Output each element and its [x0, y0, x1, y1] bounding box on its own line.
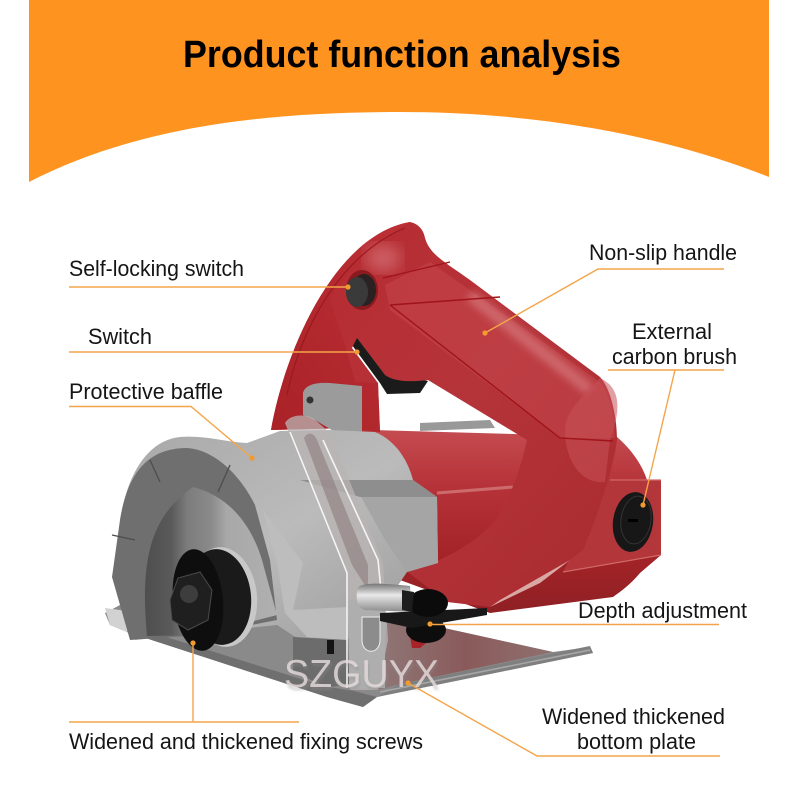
self-locking button	[346, 270, 378, 310]
callout: non-slip handle: Non-slip handle	[589, 240, 737, 265]
callout: widened thickened bottom plate: bottom plate	[577, 729, 696, 754]
callout: non-slip handle	[482, 240, 737, 336]
callout: widened thickened bottom plate: Widened thickened	[542, 704, 725, 729]
watermark: SZGUYX	[284, 653, 439, 696]
callout: self-locking switch	[69, 256, 351, 290]
blade flange and fixing bolt	[168, 544, 262, 653]
callout: depth adjustment	[427, 598, 747, 627]
callout: external carbon brush: External	[632, 319, 712, 344]
callout: protective baffle	[69, 379, 255, 461]
metal depth bracket	[285, 415, 388, 690]
callout: depth adjustment: Depth adjustment	[578, 598, 747, 623]
black carbon brush cap	[609, 490, 657, 554]
callout: widened and thickened fixing screws	[69, 640, 423, 754]
watermark: SZGUYX	[285, 656, 440, 699]
red handle and fin	[271, 222, 617, 607]
product illustration: cutting machine	[105, 222, 661, 707]
black trigger	[352, 335, 428, 394]
callout: widened and thickened fixing screws: Widened and thickened fixing screws	[69, 729, 423, 754]
header banner	[29, 0, 769, 182]
callout: self-locking switch: Self-locking switch	[69, 256, 244, 281]
title: Product function analysis	[183, 34, 621, 76]
callout: external carbon brush	[608, 319, 737, 508]
callout: protective baffle: Protective baffle	[69, 379, 223, 404]
callout: switch	[69, 324, 360, 355]
callout: external carbon brush: carbon brush	[612, 344, 737, 369]
depth adjustment knob	[357, 584, 487, 648]
base plate	[105, 600, 593, 707]
motor body	[360, 420, 661, 613]
cast metal housing	[112, 383, 438, 687]
callout: widened thickened bottom plate	[405, 680, 725, 756]
callout: switch: Switch	[88, 324, 152, 349]
